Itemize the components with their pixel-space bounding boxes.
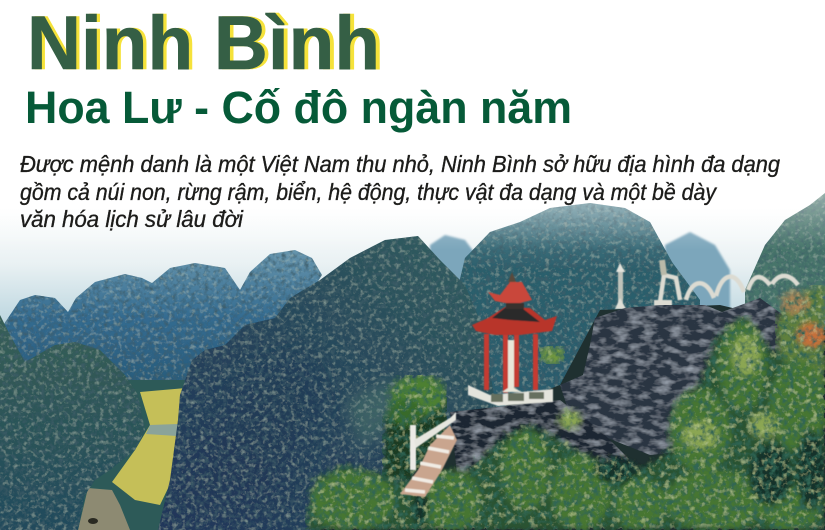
- upper roof: [488, 282, 532, 304]
- bright foliage clusters: [310, 320, 825, 530]
- river with boat: [78, 488, 130, 530]
- dragon balustrade: [654, 260, 798, 303]
- description paragraph: gồm cả núi non, rừng rậm, biển, hệ động, thực vật đa dạng và một bề dày: [20, 179, 717, 205]
- shaded face of central mountain: [180, 350, 330, 505]
- right top hill: [745, 193, 825, 340]
- background sky: [0, 0, 825, 400]
- left mountain: [0, 315, 145, 530]
- lower roof: [472, 307, 557, 335]
- description paragraph: [20, 151, 780, 232]
- foreground foliage: [305, 315, 825, 530]
- sky haze over rear peaks: [0, 190, 825, 250]
- photo: Hoa Lu karst landscape: [0, 190, 825, 530]
- pagoda interior wall: [502, 340, 522, 392]
- white stair railing: [400, 412, 457, 497]
- hilltop behind dragon, red and green foliage: [775, 285, 825, 430]
- pagoda columns: [484, 334, 538, 393]
- rice valley: [112, 388, 186, 505]
- subtitle: Hoa Lư - Cố đô ngàn năm: [25, 82, 572, 133]
- stone pillar: [615, 263, 626, 309]
- rear mountain behind pagoda: [455, 203, 700, 420]
- finial: [508, 272, 516, 282]
- title: Ninh Bình: Ninh Bình: [30, 1, 384, 86]
- lit leaves beside cliff: [539, 346, 565, 364]
- green patch on central mountain: [345, 380, 400, 450]
- dark gaps in foliage: [412, 430, 824, 525]
- title: Ninh Bình: Ninh Bình: [27, 1, 380, 86]
- far misty mountains, left: [0, 250, 322, 420]
- lit foliage highlights: [559, 335, 777, 449]
- valley base ground: [70, 380, 200, 530]
- stairs: [400, 425, 457, 497]
- lower roof dark ridge: [492, 307, 540, 322]
- valley water patch: [146, 424, 178, 436]
- central mountain: [158, 236, 500, 530]
- description paragraph: văn hóa lịch sử lâu đời: [20, 206, 244, 232]
- far misty hills, right of centre: [430, 232, 730, 330]
- white backing behind text: [0, 0, 825, 192]
- dark rock below platform: [450, 400, 640, 510]
- description paragraph: Được mệnh danh là một Việt Nam thu nhỏ, Ninh Bình sở hữu địa hình đa dạng: [20, 151, 780, 177]
- pagoda: [468, 272, 557, 406]
- small green tree above stairs: [382, 375, 447, 480]
- platform railing: [468, 385, 553, 406]
- limestone cliff: [560, 298, 810, 455]
- upper storey: [506, 303, 524, 309]
- foreground dark base: [320, 305, 825, 530]
